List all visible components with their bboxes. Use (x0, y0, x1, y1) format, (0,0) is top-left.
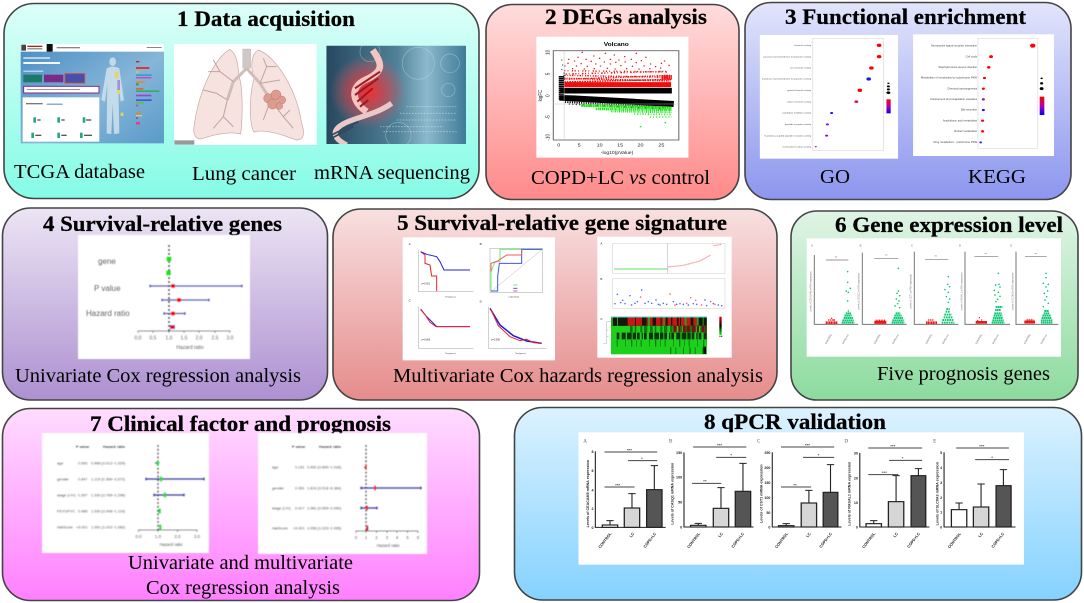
group labels: COPD+LC (942, 334, 950, 345)
scatter plots: five genes: A (811, 244, 813, 248)
image: DNA helix mRNA sequencing (326, 42, 466, 148)
KEGG bubble chart: Bile secretion (961, 109, 978, 112)
panel: 3 Functional enrichment (745, 2, 1071, 200)
volcano plot: 5 (545, 73, 552, 75)
forest plot: multivariate clinical: 3 (386, 535, 389, 540)
KM curve A (418, 250, 473, 292)
label: KEGG: KEGG (968, 166, 1026, 188)
forest plot: univariate clinical: 1.115 (0.369−3.372) (91, 478, 126, 482)
forest plot: univariate clinical: 0.307 (78, 494, 88, 498)
tick labels: 5 (940, 451, 942, 455)
forest plot: univariate clinical: gender (57, 478, 70, 482)
heading: 1 Data acquisition: 1 Data acquisition (177, 6, 355, 31)
group labels: COPD+LC (819, 532, 833, 549)
bar charts: qPCR expression of five genes: * (902, 456, 904, 461)
panel: 8 qPCR validation (514, 408, 1082, 600)
tick labels: 150 (676, 451, 682, 455)
label: mRNA sequencing: mRNA sequencing (314, 162, 470, 184)
group labels: LC (893, 532, 899, 538)
y-axis titles: Levels of RASAL1 mRNA expression (847, 461, 851, 526)
tick labels: 30 (854, 452, 858, 456)
scatter plots: five genes: E (1010, 243, 1012, 247)
volcano plot: Volcano (604, 41, 629, 48)
tick labels: 3 (940, 481, 942, 485)
forest plot: multivariate clinical: 1 (365, 535, 368, 540)
panel: 4 Survival-relative genes (2, 208, 328, 400)
forest plot: univariate clinical: 0.500 (78, 462, 88, 466)
figure: risk score, survival status and heatmap: C (600, 317, 603, 321)
heading: 7 Clinical factor and prognosis: 7 Clinical factor and prognosis (90, 411, 391, 436)
bars (602, 476, 1011, 527)
panel 4 background (2, 208, 328, 400)
red control points (826, 318, 1035, 323)
volcano plot: -5 (545, 115, 552, 119)
error bars (606, 463, 1007, 526)
group labels: COPD+LC (643, 532, 658, 549)
forest plot: univariate clinical: <0.001 (76, 526, 88, 530)
forest plot: univariate: 3.0 (227, 336, 234, 342)
tick labels: 0 (856, 526, 858, 530)
bar charts: qPCR expression of five genes: A (583, 439, 587, 444)
panel 1 background (4, 4, 479, 198)
forest plot: multivariate clinical: 1.058 (1.023−1.095) (307, 526, 342, 530)
GO bubble chart: G protein-coupled peptide receptor activity (764, 134, 812, 137)
significance lines (605, 447, 1009, 487)
forest plot: multivariate clinical: 4 (396, 535, 399, 540)
group labels: CONTROL (874, 333, 882, 345)
group labels: COPD+LC (842, 334, 850, 345)
group labels: COPD+LC (1041, 334, 1048, 345)
bar charts: qPCR expression of five genes: * (991, 455, 993, 460)
panel 2 background (486, 4, 739, 200)
heading: 8 qPCR validation: 8 qPCR validation (704, 409, 886, 434)
GO bubble chart: channel activity (794, 44, 812, 47)
tick labels: 8 (591, 450, 594, 454)
group labels: CONTROL (947, 532, 963, 549)
y-axis titles: Levels of SLC6A3 mRNA expression (935, 461, 940, 525)
ROC curve B (490, 248, 542, 293)
GO bubble chart: gated channel activity (787, 89, 812, 92)
forest plot: univariate: 0.5 (150, 336, 157, 342)
figure: risk score, survival status and heatmap: B (600, 277, 602, 281)
tick labels: 0 (680, 526, 682, 530)
label: Cox regression analysis: Cox regression analysis (146, 577, 340, 599)
bar charts: qPCR expression of five genes: * (818, 453, 820, 458)
forest plot: univariate: Hazard ratio (86, 309, 130, 318)
label: Univariate and multivariate: Univariate and multivariate (128, 552, 353, 574)
forest plot: multivariate clinical: riskScore (272, 526, 288, 530)
figure: Kaplan-Meier and ROC curves: p=0.388 (491, 339, 501, 341)
bar charts: qPCR expression of five genes: E (933, 439, 936, 444)
bar charts: qPCR expression of five genes: *** (615, 483, 621, 487)
tick labels: 4 (940, 466, 942, 470)
tick labels: 50 (766, 511, 770, 515)
figure: Kaplan-Meier and ROC curves: 1-Specificity (508, 295, 519, 298)
image: lungs with tumour (174, 44, 317, 145)
forest plot: univariate: 1.5 (181, 336, 188, 342)
forest plot: multivariate clinical: stage (I-IV) (272, 506, 292, 510)
group labels: CONTROL (686, 532, 702, 549)
volcano plot: 10 (597, 143, 603, 149)
forest plot: univariate: gene (98, 257, 116, 266)
forest plot: univariate clinical: 1.051 (1.022−1.082) (91, 526, 126, 530)
KEGG bubble chart: Complement and coagulation cascades (930, 98, 978, 101)
y-axis titles: Levels of CASQ1 mRNA expression (858, 272, 861, 310)
group labels (825, 333, 1048, 345)
forest plot: univariate clinical: 0.847 (78, 478, 88, 482)
scatter plots: five genes: ** (835, 255, 838, 259)
forest plot: multivariate clinical: 1.081 (0.559−2.090) (307, 506, 342, 510)
forest plot: univariate clinical: Hazard ratio (103, 445, 126, 449)
scatter plots: five genes (807, 238, 1061, 357)
green case points (842, 268, 1052, 323)
tick labels: 2 (591, 507, 594, 511)
figure: Kaplan-Meier and ROC curves: Time(years) (445, 352, 456, 355)
significance bars (826, 257, 1047, 260)
scatter plots: five genes: D (959, 244, 961, 248)
figure: Kaplan-Meier and ROC curves: Time(years) (445, 295, 456, 298)
black non-significant points (560, 60, 674, 109)
forest plot: univariate clinical: P value (76, 445, 89, 449)
forest plot: univariate clinical: riskScore (57, 526, 73, 530)
forest plot: univariate clinical: stage (I-IV) (57, 494, 77, 498)
group labels: CONTROL (774, 532, 790, 549)
label: Five prognosis genes: Five prognosis genes (877, 363, 1050, 385)
green down-regulated points (581, 105, 672, 127)
y-axis titles (586, 459, 940, 527)
scatter plots: five genes: ** (885, 254, 888, 258)
label: GO: GO (820, 166, 850, 188)
forest plot: multivariate clinical: 0.351 (295, 486, 305, 490)
tick labels: 0 (940, 526, 942, 530)
y-axis titles: Levels of CEACAM5 mRNA expression (810, 271, 813, 312)
KEGG bubble chart: Cell cycle (966, 55, 978, 58)
heading: 2 DEGs analysis: 2 DEGs analysis (545, 4, 707, 29)
bar charts: qPCR expression of five genes: *** (805, 443, 810, 447)
panel: 7 Clinical factor and prognosis (2, 408, 480, 600)
panel 5 background (333, 209, 777, 400)
group labels: CONTROL (598, 532, 613, 549)
bar charts: qPCR expression of five genes: *** (882, 470, 887, 475)
volcano plot (536, 37, 688, 158)
group labels: LC (629, 532, 636, 538)
tick labels: 250 (764, 451, 770, 455)
forest plot: multivariate clinical: <0.001 (293, 526, 305, 530)
group labels: COPD+LC (907, 532, 921, 549)
image: TCGA data portal screenshot (21, 44, 164, 143)
GO bubble chart: monovalent cation activity (783, 145, 812, 148)
label: Multivariate Cox hazards regression analysis: Multivariate Cox hazards regression analysis (393, 365, 763, 387)
KM curve D (489, 307, 547, 348)
tick labels: 200 (764, 466, 770, 470)
forest plot: multivariate clinical: Hazard ratio (319, 445, 342, 449)
panel: 2 DEGs analysis (486, 4, 739, 200)
red up-regulated points (564, 52, 672, 85)
bar charts: qPCR expression of five genes: ** (703, 479, 707, 484)
bar charts: qPCR expression of five genes: ** (793, 483, 797, 487)
forest plot: univariate: Hazard ratio (176, 345, 204, 351)
group labels: CONTROL (926, 333, 934, 345)
axes (814, 252, 1058, 324)
bar charts: qPCR expression of five genes: *** (890, 444, 896, 448)
forest plot: univariate clinical: age (57, 462, 63, 466)
y-axis titles: Levels of SLC6A3 mRNA expression (1011, 272, 1014, 311)
y-axis titles (810, 271, 1014, 312)
tick labels (591, 450, 942, 530)
bar charts: qPCR expression of five genes: B (669, 439, 673, 444)
heading: 5 Survival-relative gene signature: 5 Survival-relative gene signature (397, 210, 727, 235)
forest plot: univariate: 0.0 (135, 336, 142, 342)
figure: Kaplan-Meier and ROC curves: A (409, 242, 411, 246)
forest plot: univariate clinical: 1.330 (0.769−2.299) (91, 494, 126, 498)
bar charts: qPCR expression of five genes (578, 432, 1024, 565)
expression heatmap (611, 316, 707, 317)
group labels: COPD+LC (991, 532, 1005, 549)
scatter plots: five genes: ** (985, 252, 988, 256)
panel 6 background (791, 211, 1078, 400)
y-axis titles: Levels of RASAL1 mRNA expression (960, 272, 963, 311)
forest plot: multivariate clinical: gender (272, 486, 285, 490)
volcano plot: 20 (638, 143, 644, 149)
GO bubble chart: peptide receptor activity (785, 123, 812, 126)
axes (595, 451, 1015, 527)
tick labels: 10 (854, 501, 858, 505)
group labels (598, 532, 1005, 549)
volcano plot: 0 (545, 94, 552, 97)
group labels: CONTROL (862, 532, 877, 549)
forest plot: multivariate clinical: Hazard ratio (377, 543, 400, 548)
GO bubble chart: ion channel activity (790, 67, 812, 70)
forest plot: univariate clinical: 3.0 (194, 534, 201, 539)
panel: 1 Data acquisition (4, 4, 479, 198)
tick labels: 1 (940, 511, 942, 515)
volcano plot: -10 (545, 134, 552, 141)
volcano plot: 25 (658, 143, 665, 149)
panel 7 background (2, 408, 480, 600)
tick labels: 0 (591, 526, 594, 530)
tick labels: 150 (764, 481, 770, 485)
forest plot: univariate clinical: 1.030 (0.948−1.119) (91, 510, 126, 514)
forest plot: univariate clinical: 0.968 (0.912−1.029) (91, 462, 126, 466)
forest plot: multivariate clinical: age (272, 466, 278, 470)
group labels: LC (805, 532, 812, 538)
tick labels: 20 (854, 477, 858, 481)
bar charts: qPCR expression of five genes: *** (979, 444, 985, 448)
group labels: COPD+LC (731, 532, 745, 549)
scatter plots: five genes: ** (1035, 252, 1038, 256)
group labels: COPD+LC (992, 334, 1000, 345)
tick labels: 6 (591, 469, 594, 473)
figure: Kaplan-Meier and ROC curves: C (409, 299, 412, 303)
forest plot: univariate: 1.0 (166, 336, 173, 342)
GO bubble chart: metal ion transmembrane transporter activity (762, 78, 812, 81)
forest plot: univariate clinical: 2.0 (174, 534, 181, 539)
forest plot: multivariate clinical: 5 (406, 535, 409, 540)
volcano plot: 5 (578, 143, 581, 149)
forest plot: multivariate clinical: 6 (417, 535, 420, 540)
bar charts: qPCR expression of five genes: D (844, 439, 849, 444)
y-axis titles: Levels of CST1 mRNA expression (760, 464, 764, 523)
y-axis titles: Levels of CEACAM5 mRNA expression (586, 459, 590, 527)
bar charts: qPCR expression of five genes: * (730, 453, 732, 458)
figure: Kaplan-Meier and ROC curves: p=0.001 (422, 283, 431, 285)
label: TCGA database: TCGA database (14, 161, 145, 183)
group labels: CONTROL (976, 333, 984, 345)
KEGG bubble chart: Staphylococcus aureus infection (939, 66, 978, 69)
KEGG bubble chart: Metabolism of xenobiotics by cytochrome P450 (921, 77, 978, 80)
figure: Kaplan-Meier and ROC curves: B (480, 242, 482, 246)
bar charts: qPCR expression of five genes: *** (627, 448, 632, 452)
forest plot: univariate: 2.5 (212, 336, 219, 342)
KEGG bubble chart: Neuroactive ligand-receptor interaction (931, 44, 978, 47)
volcano plot: 0 (557, 143, 560, 149)
forest plot: multivariate clinical: 1.816 (0.518−6.364) (307, 486, 342, 490)
volcano plot: logFC (537, 89, 543, 101)
tick labels: 50 (678, 500, 682, 504)
y-axis titles: Levels of CASQ1 mRNA expression (671, 462, 675, 525)
forest plot: multivariate clinical: P value (292, 445, 305, 449)
forest plot: univariate clinical: 0.0 (135, 534, 142, 539)
forest plot: multivariate clinical: 0 (355, 535, 358, 540)
scatter plots: five genes: B (860, 244, 862, 248)
volcano plot: -log10(pValue) (601, 150, 634, 155)
GO bubble chart: cation channel activity (787, 100, 812, 103)
figure: Kaplan-Meier and ROC curves: Time(years) (515, 352, 526, 355)
forest plot: univariate clinical: 0.485 (78, 510, 88, 514)
forest plot: univariate clinical (42, 433, 209, 553)
scatter plots: five genes: ** (935, 255, 938, 259)
KEGG bubble chart: Chemical carcinogenesis (947, 87, 978, 90)
tick labels: 100 (764, 496, 770, 500)
KEGG bubble chart: Drug metabolism - cytochrome P450 (933, 141, 978, 144)
forest plot: multivariate clinical (258, 433, 427, 554)
heading: 3 Functional enrichment: 3 Functional enrichment (785, 4, 1027, 29)
KEGG bubble chart: Retinol metabolism (954, 130, 977, 133)
forest plot: univariate: P value (94, 284, 121, 293)
heading: 4 Survival-relative genes: 4 Survival-relative genes (43, 211, 282, 236)
label: Univariate Cox regression analysis: Univariate Cox regression analysis (15, 365, 301, 387)
group labels: CONTROL (1024, 333, 1032, 345)
forest plot: multivariate clinical: 0.952 (0.890−1.018) (307, 466, 342, 470)
forest plot: univariate: 2.0 (196, 336, 203, 342)
tick labels: 4 (591, 488, 594, 492)
forest plot: univariate clinical: FEV1/FVC (57, 510, 75, 514)
y-axis titles: Levels of CST1 mRNA expression (910, 273, 913, 309)
figure: risk score, survival status and heatmap: A (600, 241, 602, 245)
label: Lung cancer: Lung cancer (192, 163, 296, 185)
panel: 6 Gene expression level (791, 211, 1078, 400)
label: COPD+LC vs control: COPD+LC vs control (531, 167, 710, 189)
GO bubble chart (760, 35, 898, 159)
forest plot: multivariate clinical: 0.417 (295, 506, 305, 510)
scatter plots: five genes: C (911, 244, 913, 248)
bar charts: qPCR expression of five genes: * (641, 456, 643, 461)
KEGG bubble chart: Arachidonic acid metabolism (943, 119, 977, 122)
group labels: LC (978, 532, 984, 538)
panel 3 background (745, 2, 1071, 200)
forest plot: univariate clinical: 1.0 (155, 534, 162, 539)
volcano plot: 15 (617, 143, 623, 149)
tick labels: 0 (768, 526, 770, 530)
figure: Kaplan-Meier and ROC curves: p=0.866 (422, 339, 431, 341)
forest plot: multivariate clinical: 0.151 (295, 466, 305, 470)
survival status scatter (615, 290, 722, 306)
group labels: LC (718, 532, 724, 538)
heading: 6 Gene expression level: 6 Gene expression level (835, 212, 1063, 237)
forest plot: univariate clinical: Hazard ratio (160, 542, 183, 547)
figure: risk score, survival status and heatmap (597, 237, 732, 358)
group labels: CONTROL (825, 333, 833, 345)
KM curve C (418, 307, 473, 348)
group labels: COPD+LC (892, 334, 900, 345)
bar charts: qPCR expression of five genes: *** (717, 443, 722, 447)
GO bubble chart: passive transmembrane transporter activity (764, 55, 812, 58)
panel 8 background (514, 408, 1082, 600)
figure: Kaplan-Meier and ROC curves (403, 237, 555, 360)
tick labels: 2 (940, 496, 942, 500)
bar charts: qPCR expression of five genes: C (757, 439, 760, 444)
KEGG bubble chart (913, 34, 1054, 156)
tick labels: 100 (676, 475, 682, 479)
forest plot: univariate (78, 235, 250, 359)
GO bubble chart: peptidase inhibitor activity (783, 112, 812, 115)
panel: 5 Survival-relative gene signature (333, 209, 777, 400)
forest plot: multivariate clinical: 2 (375, 535, 378, 540)
figure: Kaplan-Meier and ROC curves: D (480, 299, 483, 303)
volcano plot: 10 (545, 50, 552, 55)
